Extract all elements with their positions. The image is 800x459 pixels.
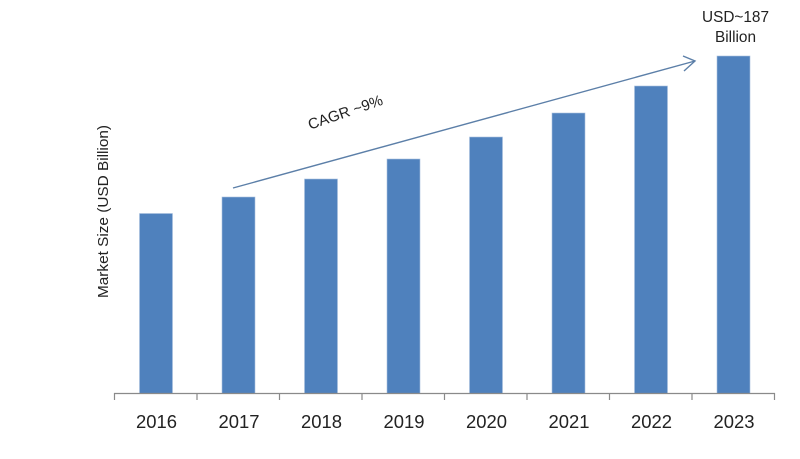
bar: 2020 (470, 137, 502, 394)
bar: 2018 (304, 179, 338, 394)
bar: 2022 (634, 86, 668, 394)
x axis labels: 2017 (218, 412, 260, 432)
y axis title: Market Size (USD Billion) (95, 125, 112, 298)
bars (140, 56, 750, 394)
bar: 2023 (717, 56, 750, 394)
callout: 2023 value: USD~187 (702, 9, 769, 26)
x axis labels: 2022 (631, 412, 672, 432)
callout: 2023 value: Billion (715, 29, 756, 46)
bar: 2017 (222, 197, 255, 394)
bar: 2016 (140, 214, 172, 394)
x axis labels: 2021 (548, 412, 590, 432)
x axis labels: 2016 (136, 412, 177, 432)
x axis (114, 393, 775, 400)
bar: 2021 (552, 113, 585, 394)
x axis labels: 2018 (301, 412, 342, 432)
arrow: CAGR trend (233, 56, 695, 188)
x axis labels (136, 412, 754, 432)
x axis labels: 2020 (466, 412, 507, 432)
callout: 2023 value (702, 9, 769, 46)
callout: CAGR: CAGR ~9% (306, 92, 385, 133)
x axis labels: 2019 (384, 412, 424, 432)
bar: 2019 (387, 159, 420, 394)
x axis labels: 2023 (714, 412, 754, 432)
